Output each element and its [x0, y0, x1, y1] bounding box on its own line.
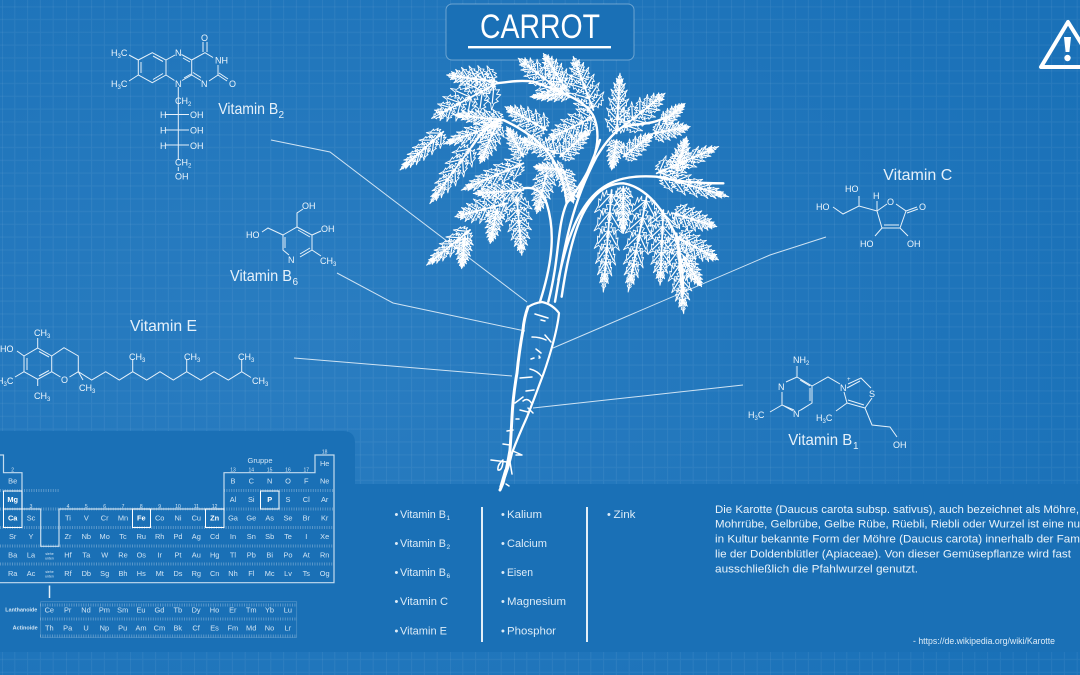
chart: periodic table with highlighted elements: Es	[210, 624, 219, 632]
molecule: Vitamin B1: 3	[822, 419, 826, 425]
chart: periodic table with highlighted elements: 17	[304, 468, 309, 474]
chart: periodic table with highlighted elements: Re	[118, 550, 128, 560]
molecule: Vitamin B2: CH	[175, 96, 188, 106]
chart: periodic table with highlighted elements: Md	[246, 624, 256, 632]
connector: Vitamin B2 to carrot	[271, 140, 527, 302]
molecule: Vitamin E: CH	[34, 328, 47, 338]
list: vitamins: Vitamin E	[400, 626, 447, 638]
chart: periodic table with highlighted elements: Ne	[320, 476, 329, 486]
chart: periodic table with highlighted elements: 4	[67, 504, 70, 510]
chart: periodic table with highlighted elements: Pm	[99, 606, 110, 614]
label: Vitamin E: Vitamin E	[130, 318, 197, 335]
chart: periodic table with highlighted elements: O	[285, 476, 291, 486]
chart: periodic table with highlighted elements: Sr	[9, 532, 17, 541]
label: Vitamin B2: 2	[278, 110, 284, 121]
chart: periodic table with highlighted elements: Ge	[246, 514, 256, 522]
chart: periodic table with highlighted elements: Mn	[118, 514, 128, 522]
chart: periodic table with highlighted elements: Mt	[156, 569, 164, 578]
list: trace element: Zink	[614, 509, 636, 521]
molecule: Vitamin E: 3	[47, 334, 51, 340]
chart: periodic table with highlighted elements: Xe	[320, 532, 329, 541]
chart: periodic table with highlighted elements: 15	[267, 468, 273, 474]
molecule: Vitamin B2: 3	[118, 54, 122, 60]
molecule: Vitamin B2: O	[201, 33, 208, 43]
chart: periodic table with highlighted elements: Dy	[192, 606, 201, 614]
molecule: Vitamin B6: 3	[333, 262, 337, 268]
divider	[586, 507, 588, 642]
molecule: Vitamin B2: N	[175, 79, 182, 89]
chart: periodic table with highlighted elements: Bi	[266, 550, 273, 560]
chart: periodic table with highlighted elements: Eu	[136, 606, 146, 614]
chart: periodic table with highlighted elements: No	[265, 624, 274, 632]
chart: periodic table with highlighted elements: 10	[175, 504, 181, 510]
list: vitamins	[394, 509, 450, 638]
chart: periodic table with highlighted elements: Br	[303, 514, 311, 522]
chart: periodic table with highlighted elements: Y	[29, 532, 34, 541]
molecule: Vitamin B2: O	[229, 79, 236, 89]
molecule: Vitamin E: 3	[265, 382, 269, 388]
chart: periodic table with highlighted elements: S	[286, 495, 291, 504]
chart: periodic table with highlighted elements: Bh	[118, 569, 128, 578]
label: Vitamin B6: 6	[292, 277, 298, 288]
chart: periodic table with highlighted elements: 2	[11, 468, 14, 474]
molecule: Vitamin B1: NH	[793, 355, 806, 365]
molecule: Vitamin B1: S	[869, 389, 875, 399]
molecule: Vitamin E: CH	[129, 352, 142, 362]
molecule: Vitamin B2: 3	[118, 85, 122, 91]
chart: periodic table with highlighted elements: Si	[248, 495, 255, 504]
chart: periodic table with highlighted elements: Cd	[210, 532, 219, 541]
molecule: Vitamin B2: OH	[190, 126, 204, 136]
chart: periodic table with highlighted elements: Po	[283, 550, 293, 560]
chart: periodic table with highlighted elements: 6	[103, 504, 106, 510]
chart: periodic table with highlighted elements: Au	[192, 550, 201, 560]
molecule: Vitamin E: O	[61, 375, 68, 385]
chart: periodic table with highlighted elements: At	[303, 550, 310, 560]
chart: periodic table with highlighted elements: Sm	[117, 606, 128, 614]
chart: periodic table with highlighted elements: Sb	[265, 532, 274, 541]
chart: periodic table with highlighted elements: F	[304, 476, 309, 486]
molecule: Vitamin B1: N	[840, 383, 846, 393]
chart: periodic table with highlighted elements: Np	[100, 624, 109, 632]
molecule: Vitamin B2: N	[201, 79, 208, 89]
chart: periodic table with highlighted elements: Nd	[81, 606, 91, 614]
molecule: Vitamin B6: OH	[302, 201, 316, 211]
molecule: Vitamin B1: N	[793, 409, 800, 419]
list: minerals: Eisen	[507, 567, 533, 579]
molecule: Vitamin E: CH	[238, 352, 251, 362]
chart: periodic table with highlighted elements: Th	[45, 624, 54, 632]
text block: description: lie der Doldenblütler (Apiaceae). Von dieser Gemüsepflanze wird fast	[715, 548, 1071, 560]
chart: periodic table with highlighted elements: Zr	[65, 532, 72, 541]
molecule: Vitamin C: O	[919, 202, 926, 212]
chart: periodic table with highlighted elements: Tc	[119, 532, 127, 541]
molecule: Vitamin E: CH	[252, 376, 265, 386]
chart: periodic table with highlighted elements: Mc	[265, 569, 275, 578]
chart: periodic table with highlighted elements: 16	[285, 468, 291, 474]
chart: periodic table with highlighted elements: W	[101, 550, 108, 560]
chart: periodic table with highlighted elements: Se	[283, 514, 293, 522]
molecule: Vitamin B2: H	[160, 126, 166, 136]
chart: periodic table with highlighted elements: Rn	[320, 550, 329, 560]
molecule: Vitamin E: CH	[34, 391, 47, 401]
chart: periodic table with highlighted elements: B	[231, 476, 236, 486]
molecule: Vitamin E: 3	[197, 358, 201, 364]
molecule: Vitamin B6: HO	[246, 230, 260, 240]
chart: periodic table with highlighted elements: Mo	[100, 532, 110, 541]
molecule: Vitamin E: CH	[79, 383, 92, 393]
list: trace element: •	[607, 509, 611, 521]
list: minerals: Magnesium	[507, 596, 566, 608]
chart: periodic table with highlighted elements: Co	[155, 514, 164, 522]
label: Vitamin B1: 1	[853, 441, 859, 452]
list: minerals: •	[501, 538, 505, 550]
chart: periodic table with highlighted elements: Ra	[8, 569, 18, 578]
molecule: Vitamin C: HO	[845, 184, 858, 194]
molecule: Vitamin B2: NH	[215, 56, 228, 66]
molecule: Vitamin B1: N	[778, 382, 784, 392]
molecule: Vitamin E: CH	[184, 352, 197, 362]
chart: periodic table with highlighted elements: unten	[45, 574, 54, 578]
molecule: Vitamin B6: N	[288, 255, 294, 265]
chart: periodic table with highlighted elements: Ce	[45, 606, 54, 614]
list: minerals: •	[501, 509, 505, 521]
list: minerals: •	[501, 567, 505, 579]
chart: periodic table with highlighted elements: Ar	[321, 495, 329, 504]
chart: periodic table with highlighted elements: Ts	[303, 569, 310, 578]
molecule: Vitamin B2: H	[111, 48, 118, 58]
molecule: Vitamin C: HO	[860, 239, 874, 249]
panel: bottom information band	[0, 431, 1080, 652]
molecule: Vitamin B1: 2	[806, 361, 810, 367]
chart: periodic table with highlighted elements: siehe	[45, 552, 54, 556]
chart: periodic table with highlighted elements: Sn	[247, 532, 256, 541]
chart: periodic table with highlighted elements: 3	[30, 504, 33, 510]
chart: periodic table with highlighted elements: C	[249, 476, 255, 486]
list: vitamins: •	[394, 567, 398, 579]
chart: periodic table with highlighted elements: 5	[85, 504, 88, 510]
chart: periodic table with highlighted elements: Lu	[284, 606, 292, 614]
text block: description: Mohrrübe, Gelbrübe, Gelbe Rübe, Rüebli, Riebli oder Wurzel ist eine nu	[715, 518, 1080, 530]
chart: periodic table with highlighted elements: 9	[158, 504, 161, 510]
chart: periodic table with highlighted elements: N	[267, 476, 272, 486]
molecule: Vitamin C: O	[887, 197, 894, 207]
molecule: Vitamin B1: C	[758, 410, 765, 420]
molecule: Vitamin B6	[246, 201, 337, 268]
list: vitamins: Vitamin B	[400, 567, 446, 579]
chart: periodic table with highlighted elements: Ti	[65, 514, 71, 522]
chart: periodic table with highlighted elements: 8	[140, 504, 143, 510]
chart: periodic table with highlighted elements: Pr	[64, 606, 72, 614]
molecule: Vitamin B2: C	[121, 79, 128, 89]
list: minerals: •	[501, 596, 505, 608]
chart: periodic table with highlighted elements: Fe	[137, 514, 146, 522]
chart: periodic table with highlighted elements: U	[83, 624, 89, 632]
chart: periodic table with highlighted elements: Yb	[265, 606, 274, 614]
molecule: Vitamin B2: C	[121, 48, 128, 58]
list: vitamins: •	[394, 509, 398, 521]
chart: periodic table with highlighted elements: Pt	[175, 550, 181, 560]
chart: periodic table with highlighted elements: Rf	[64, 569, 73, 578]
chart: periodic table with highlighted elements: Os	[137, 550, 146, 560]
chart: periodic table with highlighted elements: Ds	[173, 569, 183, 578]
list: vitamins: •	[394, 596, 398, 608]
list: vitamins: 2	[446, 544, 450, 551]
chart: periodic table with highlighted elements: Rh	[155, 532, 164, 541]
molecule: Vitamin B2: OH	[175, 172, 188, 182]
molecule: Vitamin B2: OH	[190, 110, 204, 120]
chart: periodic table with highlighted elements: Nb	[82, 532, 91, 541]
chart: periodic table with highlighted elements: Pd	[173, 532, 183, 541]
title box	[446, 4, 634, 60]
list: minerals: Calcium	[507, 538, 547, 550]
chart: periodic table with highlighted elements: Ga	[228, 514, 239, 522]
chart: periodic table with highlighted elements: Al	[230, 495, 237, 504]
chart: periodic table with highlighted elements: As	[265, 514, 274, 522]
list: vitamins: Vitamin B	[400, 538, 446, 550]
title box: CARROT	[480, 8, 600, 46]
chart: periodic table with highlighted elements: He	[320, 459, 329, 468]
chart: periodic table with highlighted elements: Ho	[210, 606, 219, 614]
chart: periodic table with highlighted elements: Og	[320, 569, 330, 578]
molecule: Vitamin B1: H	[748, 410, 754, 420]
chart: periodic table with highlighted elements: Tb	[173, 606, 182, 614]
chart: periodic table with highlighted elements: Ba	[8, 550, 18, 560]
list: minerals: Kalium	[507, 509, 542, 521]
molecule: Vitamin E: 3	[4, 382, 8, 388]
chart: periodic table with highlighted elements: Tm	[246, 606, 257, 614]
chart: periodic table with highlighted elements: Lr	[285, 624, 292, 632]
illustration: carrot foliage	[392, 43, 733, 315]
chart: periodic table with highlighted elements: Ta	[82, 550, 91, 560]
chart: periodic table with highlighted elements: Fl	[248, 569, 255, 578]
list: minerals: •	[501, 626, 505, 638]
chart: periodic table with highlighted elements: Pa	[63, 624, 73, 632]
molecule: Vitamin C: H	[873, 191, 880, 201]
molecule: Vitamin B2: 2	[188, 164, 192, 170]
chart: periodic table with highlighted elements	[0, 450, 334, 637]
chart: periodic table with highlighted elements: Zn	[210, 514, 220, 522]
list: minerals: Phosphor	[507, 626, 556, 638]
chart: periodic table with highlighted elements: Cu	[192, 514, 201, 522]
text block: description: Die Karotte (Daucus carota subsp. sativus), auch bezeichnet als Möhre,	[715, 504, 1079, 516]
list: vitamins: Vitamin B	[400, 509, 446, 521]
chart: periodic table with highlighted elements: Cl	[303, 495, 310, 504]
chart: periodic table with highlighted elements: Ag	[192, 532, 201, 541]
chart: periodic table with highlighted elements: 11	[194, 504, 199, 510]
divider	[481, 507, 483, 642]
chart: periodic table with highlighted elements: Rg	[192, 569, 201, 578]
label: Vitamin B6: Vitamin B	[230, 268, 292, 285]
chart: periodic table with highlighted elements: Nh	[228, 569, 238, 578]
molecule: Vitamin B2: CH	[175, 158, 188, 168]
chart: periodic table with highlighted elements: Mg	[7, 495, 19, 504]
molecule: Vitamin E: 3	[142, 358, 146, 364]
molecule: Vitamin B2	[111, 33, 236, 182]
chart: periodic table with highlighted elements: 12	[212, 504, 218, 510]
molecule: Vitamin B2: H	[160, 110, 166, 120]
molecule: Vitamin B6: OH	[321, 224, 334, 234]
chart: periodic table with highlighted elements: 14	[249, 468, 254, 474]
molecule: Vitamin B1: 3	[754, 416, 758, 422]
molecule: Vitamin B1: C	[826, 413, 833, 423]
connector: Vitamin B6 to carrot	[337, 273, 525, 331]
molecule: Vitamin E: 3	[251, 358, 255, 364]
molecule: Vitamin C	[816, 184, 926, 249]
molecule: Vitamin B2: 2	[188, 102, 192, 108]
chart: periodic table with highlighted elements: unten	[45, 556, 54, 560]
chart: periodic table with highlighted elements: Cn	[210, 569, 219, 578]
molecule: Vitamin E: HO	[0, 344, 14, 354]
molecule: Vitamin B2: H	[160, 141, 166, 151]
molecule: Vitamin B1: H	[816, 413, 822, 423]
molecule: Vitamin E: 3	[92, 389, 96, 395]
connector: Vitamin B1 to carrot	[533, 385, 743, 408]
chart: periodic table with highlighted elements: Be	[8, 476, 17, 486]
molecule: Vitamin B2: OH	[190, 141, 204, 151]
illustration: carrot root	[491, 302, 559, 490]
chart: periodic table with highlighted elements: Ca	[8, 514, 18, 522]
text block: description: in Kultur bekannte Form der Möhre (Daucus carota) innerhalb der Fam	[715, 534, 1080, 546]
chart: periodic table with highlighted elements: Sg	[100, 569, 109, 578]
chart: periodic table with highlighted elements: Hs	[137, 569, 146, 578]
chart: periodic table with highlighted elements: Cf	[192, 624, 201, 632]
chart: periodic table with highlighted elements: Cr	[101, 514, 109, 522]
text block: description	[715, 504, 1080, 576]
molecule: Vitamin B1: OH	[893, 440, 906, 450]
chart: periodic table with highlighted elements: Bk	[173, 624, 182, 632]
chart: periodic table with highlighted elements: siehe	[45, 570, 54, 574]
chart: periodic table with highlighted elements: 13	[230, 468, 236, 474]
chart: periodic table with highlighted elements: Kr	[321, 514, 329, 522]
list: minerals	[501, 509, 566, 638]
chart: periodic table with highlighted elements: Gd	[154, 606, 164, 614]
chart: periodic table with highlighted elements: I	[305, 532, 307, 541]
list: vitamins: •	[394, 626, 398, 638]
source citation: - https://de.wikipedia.org/wiki/Karotte	[913, 636, 1055, 646]
list: vitamins: •	[394, 538, 398, 550]
chart: periodic table with highlighted elements: Pb	[247, 550, 256, 560]
chart: periodic table with highlighted elements: Er	[229, 606, 237, 614]
molecule: Vitamin E	[0, 328, 269, 403]
chart: periodic table with highlighted elements: Actinoide	[13, 626, 38, 632]
molecule: Vitamin B2: N	[175, 48, 182, 58]
chart: periodic table with highlighted elements: Sc	[27, 514, 36, 522]
chart: periodic table with highlighted elements: Lv	[284, 569, 292, 578]
chart: periodic table with highlighted elements: Lanthanoide	[5, 608, 38, 614]
molecule: Vitamin B6: CH	[320, 256, 333, 266]
chart: periodic table with highlighted elements: Ni	[175, 514, 182, 522]
chart: periodic table with highlighted elements: In	[230, 532, 236, 541]
chart: periodic table with highlighted elements: Ru	[137, 532, 146, 541]
connector: Vitamin C to carrot	[553, 237, 826, 348]
label: Vitamin C: Vitamin C	[883, 167, 952, 184]
molecule: Vitamin B1: +	[847, 377, 851, 383]
chart: periodic table with highlighted elements: Tl	[230, 550, 236, 560]
text block: description: ausschließlich die Pfahlwurzel genutzt.	[715, 564, 918, 576]
label: Vitamin B1: Vitamin B	[788, 432, 852, 449]
chart: periodic table with highlighted elements: 7	[122, 504, 125, 510]
chart: periodic table with highlighted elements: Ir	[157, 550, 162, 560]
chart: periodic table with highlighted elements: Am	[135, 624, 147, 632]
chart: periodic table with highlighted elements: Gruppe	[247, 456, 273, 465]
chart: periodic table with highlighted elements: Hg	[210, 550, 219, 560]
chart: periodic table with highlighted elements: Ac	[27, 569, 36, 578]
chart: periodic table with highlighted elements: V	[84, 514, 89, 522]
chart: periodic table with highlighted elements: Te	[284, 532, 292, 541]
molecule: Vitamin C: HO	[816, 202, 830, 212]
molecule: Vitamin B1	[748, 355, 906, 450]
list: vitamins: 6	[446, 573, 450, 580]
chart: periodic table with highlighted elements: P	[267, 495, 272, 504]
list: vitamins: Vitamin C	[400, 596, 448, 608]
chart: periodic table with highlighted elements: La	[27, 550, 36, 560]
molecule: Vitamin E: 3	[47, 397, 51, 403]
molecule: Vitamin E: C	[7, 376, 14, 386]
label: Vitamin B2: Vitamin B	[218, 101, 278, 118]
molecule: Vitamin C: OH	[907, 239, 920, 249]
chart: periodic table with highlighted elements: Pu	[118, 624, 127, 632]
chart: periodic table with highlighted elements: Cm	[154, 624, 165, 632]
chart: periodic table with highlighted elements: Db	[82, 569, 91, 578]
icon: warning triangle	[1041, 22, 1080, 67]
chart: periodic table with highlighted elements: Fm	[227, 624, 238, 632]
chart: periodic table with highlighted elements: 18	[322, 450, 328, 456]
list: vitamins: 1	[446, 515, 450, 522]
molecule: Vitamin B2: H	[111, 79, 118, 89]
connector: Vitamin E to carrot	[294, 358, 512, 376]
chart: periodic table with highlighted elements: Hf	[64, 550, 73, 560]
